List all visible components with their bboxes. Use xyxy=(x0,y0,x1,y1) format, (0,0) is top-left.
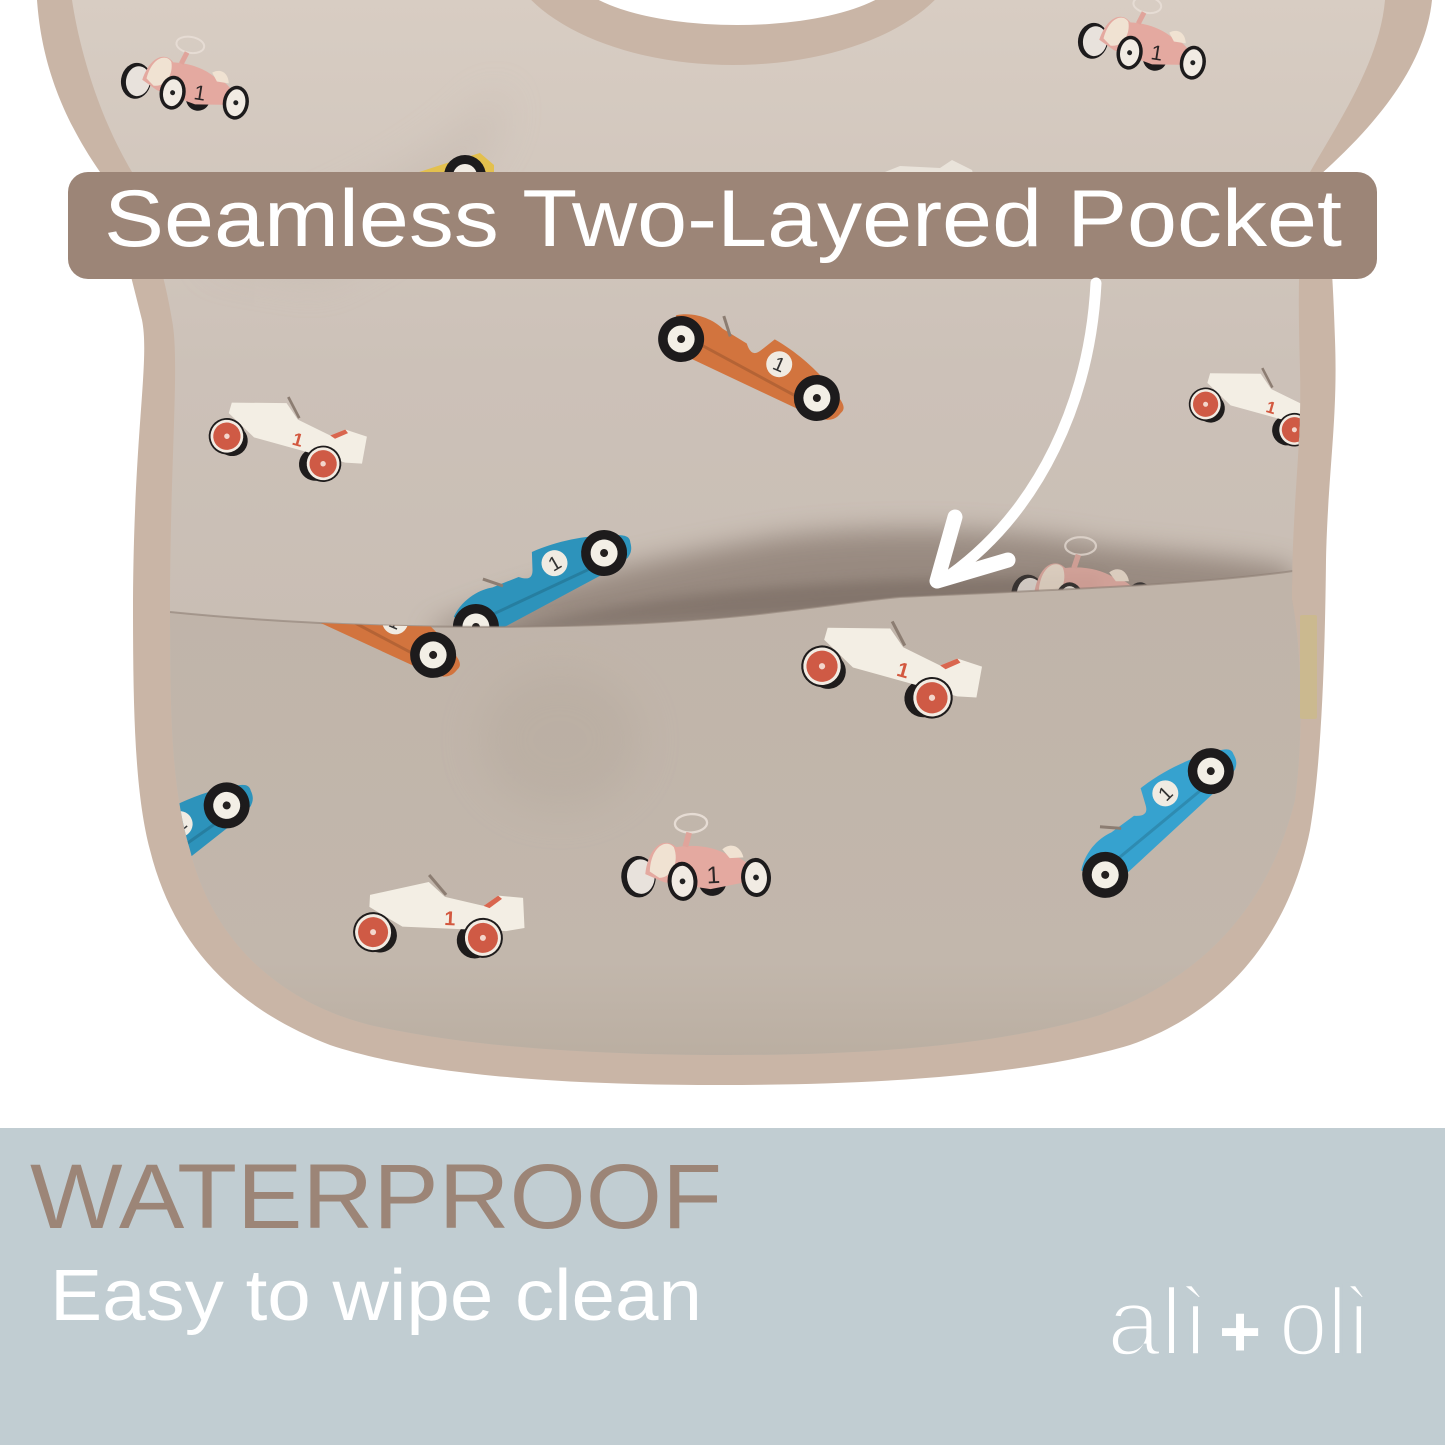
pocket opening shadow xyxy=(430,529,1295,640)
neck opening xyxy=(503,0,963,65)
soft fold shading xyxy=(200,90,503,280)
car: pink lower centre xyxy=(618,810,772,904)
pocket layer xyxy=(170,570,1300,1055)
arrow pointing to pocket xyxy=(937,283,1096,581)
car: white behind heading xyxy=(885,160,975,180)
banner text: Seamless Two-Layered Pocket xyxy=(104,174,1342,264)
car: white lower left xyxy=(352,871,527,961)
pocket fabric xyxy=(100,570,1320,1060)
bottom info band xyxy=(0,1128,1445,1445)
car: orange upper centre xyxy=(651,295,859,431)
car: pink upper right xyxy=(1075,0,1215,82)
band background xyxy=(0,1128,1445,1445)
title: waterproof: WATERPROOF xyxy=(30,1146,722,1248)
car: pink upper left xyxy=(118,27,258,122)
car: orange clipped by pocket xyxy=(321,623,460,678)
brand logo: alì xyxy=(1107,1269,1209,1376)
brand logo xyxy=(1107,1269,1371,1376)
car: white left xyxy=(204,379,374,492)
neck cutout xyxy=(572,0,902,25)
brand logo: + xyxy=(1219,1292,1261,1372)
car: blue left edge xyxy=(180,782,253,856)
car: blue at pocket opening xyxy=(437,506,641,658)
banner box xyxy=(68,172,1377,279)
car: white on pocket xyxy=(801,620,982,719)
bib back fabric xyxy=(72,0,1385,1055)
car: blue lower right xyxy=(1081,748,1236,898)
subtitle: Easy to wipe clean xyxy=(50,1256,702,1336)
pocket edge line xyxy=(170,570,1300,627)
car: pink in pocket shadow xyxy=(1011,537,1154,620)
neck binding xyxy=(503,0,963,65)
heading banner xyxy=(68,172,1377,279)
car: white right edge xyxy=(1188,368,1300,446)
bib binding trim xyxy=(37,0,1432,1085)
car: yellow behind heading xyxy=(410,153,494,197)
sewn label tag xyxy=(1300,615,1317,719)
pocket crease xyxy=(480,670,640,810)
brand logo: olì xyxy=(1279,1269,1371,1376)
bib photograph xyxy=(37,0,1432,1085)
